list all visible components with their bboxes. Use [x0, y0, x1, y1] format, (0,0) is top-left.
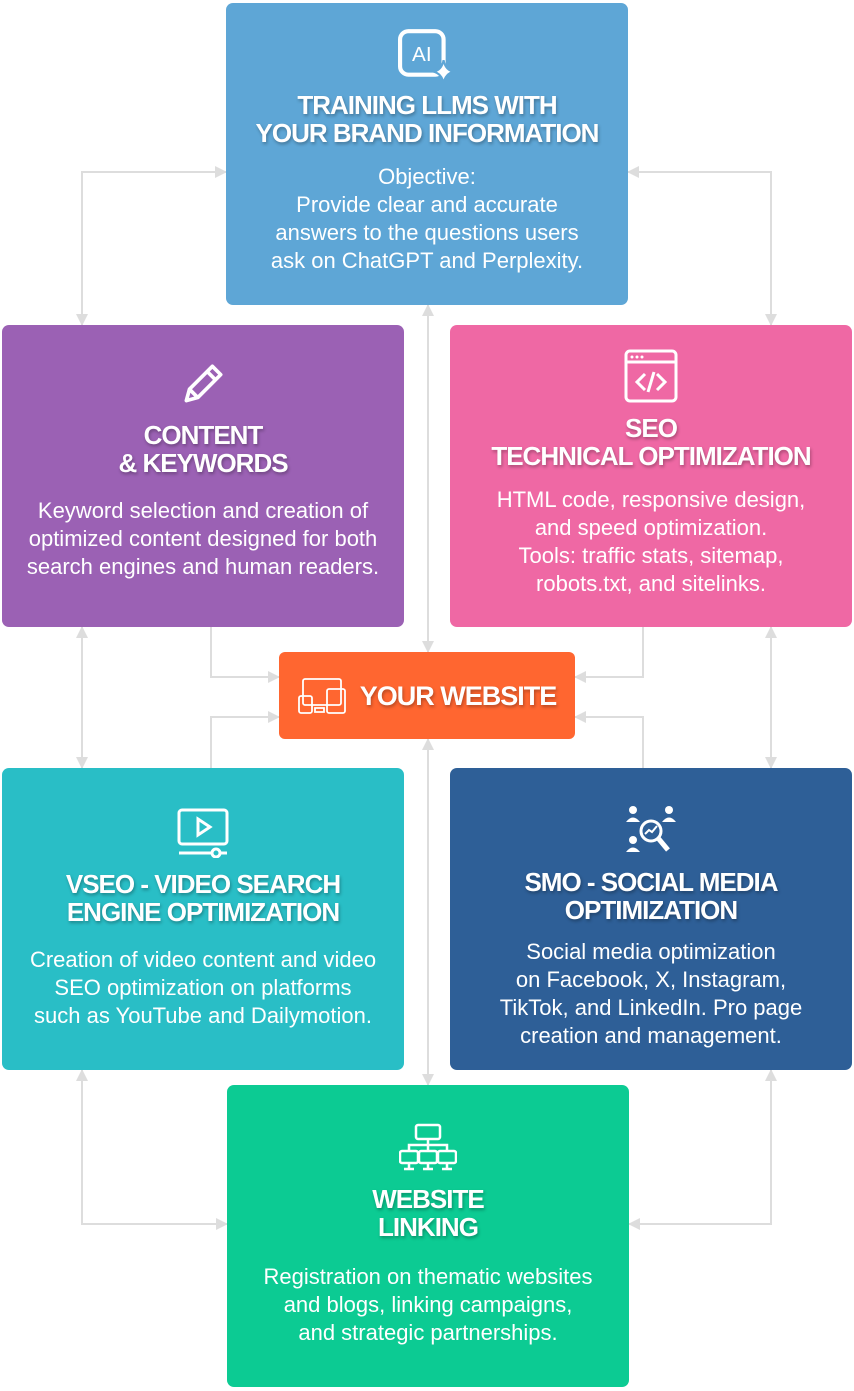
- text: Creation of video content and video: [30, 947, 376, 972]
- center: your website: [279, 652, 575, 739]
- heading: ENGINE OPTIMIZATION: [67, 897, 339, 927]
- text: search engines and human readers.: [27, 554, 379, 579]
- text: Keyword selection and creation of: [38, 498, 368, 523]
- text: Social media optimization: [526, 939, 776, 964]
- text: SEO optimization on platforms: [54, 975, 352, 1000]
- icon: AI: [398, 29, 450, 80]
- text: Objective:: [378, 164, 476, 189]
- icon: social people: [626, 806, 676, 852]
- panel: content & keywords: [2, 325, 404, 627]
- text: on Facebook, X, Instagram,: [516, 967, 786, 992]
- heading: [491, 413, 813, 471]
- panel: website linking: [227, 1085, 629, 1387]
- text: ask on ChatGPT and Perplexity.: [271, 248, 583, 273]
- heading: [118, 420, 290, 478]
- icon: video: [178, 808, 228, 858]
- heading: LINKING: [378, 1212, 478, 1242]
- icon: network: [399, 1124, 457, 1170]
- text: and strategic partnerships.: [298, 1320, 558, 1345]
- heading: VSEO - VIDEO SEARCH: [66, 869, 340, 899]
- text: [497, 487, 805, 596]
- icon: AI: AI: [412, 43, 432, 66]
- heading: CONTENT: [144, 420, 262, 450]
- heading: YOUR WEBSITE: [360, 680, 556, 710]
- text: and blogs, linking campaigns,: [284, 1292, 572, 1317]
- text: HTML code, responsive design,: [497, 487, 805, 512]
- text: Registration on thematic websites: [264, 1264, 592, 1289]
- heading: [66, 869, 342, 927]
- heading: SMO - SOCIAL MEDIA: [524, 867, 778, 897]
- text: optimized content designed for both: [29, 526, 377, 551]
- heading: [524, 867, 780, 925]
- panel: SMO: [450, 768, 852, 1070]
- text: Tools: traffic stats, sitemap,: [519, 543, 783, 568]
- text: TikTok, and LinkedIn. Pro page: [500, 995, 802, 1020]
- icon: devices: [298, 678, 346, 714]
- text: [30, 947, 376, 1028]
- icon: pencil: [184, 364, 223, 402]
- panel: SEO technical: [450, 325, 852, 627]
- heading: [372, 1184, 486, 1242]
- heading: WEBSITE: [372, 1184, 484, 1214]
- heading: YOUR BRAND INFORMATION: [256, 118, 598, 148]
- heading: [256, 90, 600, 148]
- heading: OPTIMIZATION: [565, 895, 737, 925]
- icon: code window: [624, 350, 678, 402]
- heading: TRAINING LLMS WITH: [297, 90, 557, 120]
- text: answers to the questions users: [275, 220, 579, 245]
- text: [27, 498, 379, 579]
- heading: & KEYWORDS: [118, 448, 288, 478]
- text: creation and management.: [520, 1023, 782, 1048]
- text: [264, 1264, 592, 1345]
- heading: SEO: [625, 413, 677, 443]
- panel: training LLMs: [226, 3, 628, 305]
- text: Provide clear and accurate: [296, 192, 558, 217]
- text: robots.txt, and sitelinks.: [536, 571, 766, 596]
- heading: TECHNICAL OPTIMIZATION: [491, 441, 811, 471]
- text: and speed optimization.: [535, 515, 767, 540]
- text: such as YouTube and Dailymotion.: [34, 1003, 372, 1028]
- text: [271, 164, 583, 273]
- text: [500, 939, 802, 1048]
- panel: VSEO: [2, 768, 404, 1070]
